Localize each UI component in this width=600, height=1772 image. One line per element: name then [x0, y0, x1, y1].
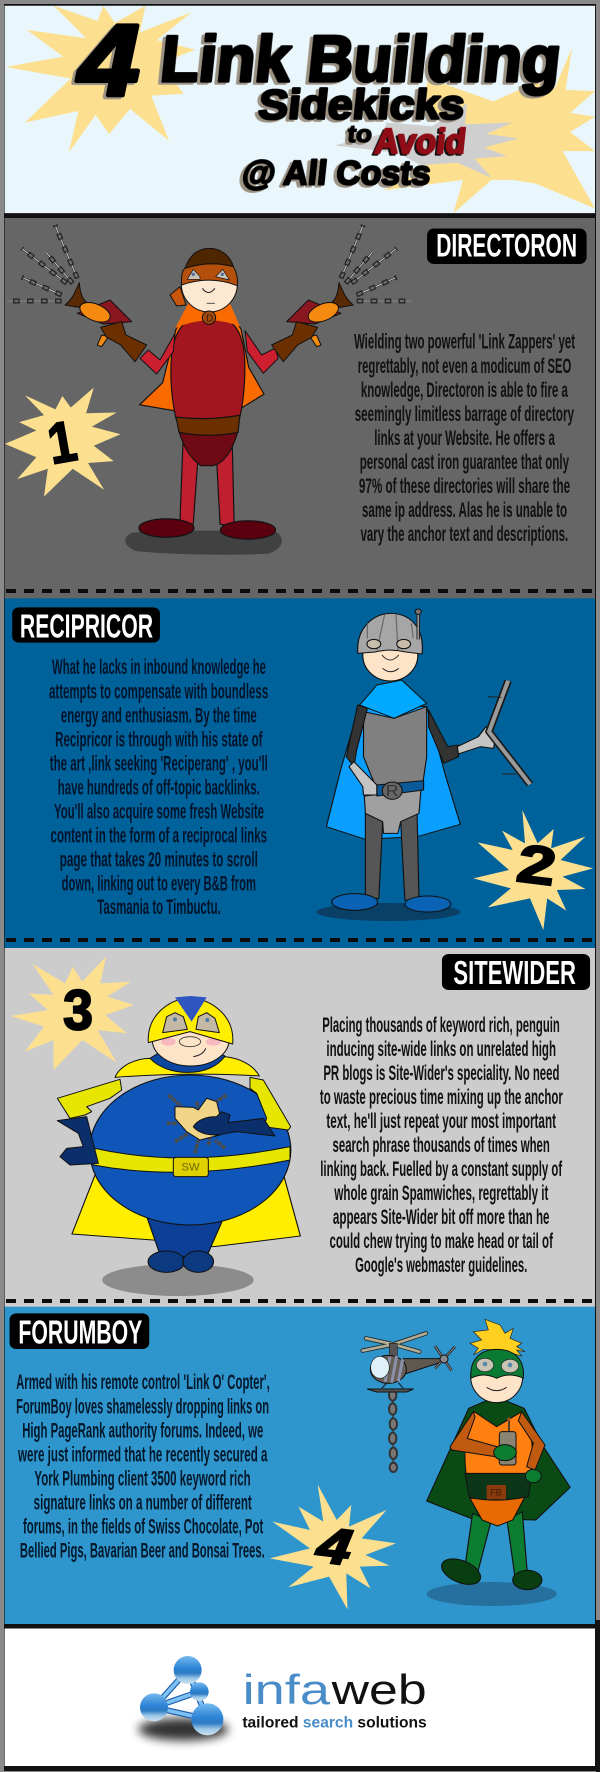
- panel: Forumboy: Bellied Pigs, Bavarian Beer and Bonsai Trees.: [20, 1538, 265, 1562]
- buckle: R: [386, 783, 399, 800]
- badge: number 3: [11, 957, 134, 1070]
- title: to: to: [346, 121, 373, 148]
- head: [470, 1319, 525, 1403]
- logo wordmark: web: [330, 1666, 427, 1713]
- skid: [367, 1383, 413, 1392]
- badge: number 4: [270, 1484, 396, 1609]
- logo wordmark: infa: [243, 1666, 331, 1713]
- title: Sidekicks: Sidekicks: [256, 81, 467, 128]
- arms: [140, 331, 278, 374]
- reciperang: [488, 681, 530, 784]
- panel: title banner: [5, 4, 595, 213]
- logo tagline: tailored search solutions: [242, 1714, 427, 1731]
- chain: [389, 1389, 397, 1472]
- character: Sitewider: [57, 996, 300, 1296]
- window: [371, 1356, 389, 1378]
- upper body: [57, 996, 291, 1177]
- right arm: [250, 1077, 291, 1130]
- panel: Recipricor: Recipricor is through with his state of: [55, 727, 263, 751]
- character: Forumboy: [427, 1319, 570, 1606]
- starburst: right: [383, 48, 595, 213]
- panel: Recipricor: attempts to compensate with boundless: [49, 679, 268, 703]
- panel: Recipricor: [5, 598, 595, 948]
- starburst: left: [6, 6, 195, 152]
- panel: Forumboy: High PageRank authority forums. Indeed, we: [22, 1418, 263, 1442]
- head: [170, 248, 240, 328]
- panel: Recipricor: have hundreds of off-topic backlinks.: [58, 775, 260, 799]
- heading: Forumboy: [10, 1313, 149, 1351]
- logo wordmark: [243, 1666, 427, 1713]
- panel: Forumboy: forums, in the fields of Swiss Chocolate, Pot: [23, 1514, 263, 1538]
- panel: Recipricor: content in the form of a reciprocal links: [51, 823, 267, 847]
- panel: Forumboy: Armed with his remote control 'Link O' Copter',: [16, 1369, 270, 1394]
- panel: Forumboy: [5, 1307, 595, 1624]
- buckle: [382, 782, 402, 800]
- forearms and hands: [349, 727, 496, 795]
- belt: [377, 781, 424, 796]
- body text: Sitewider: [320, 1012, 563, 1277]
- buckle: FB: [490, 1487, 502, 1497]
- panel: Forumboy: ForumBoy loves shamelessly dropping links on: [16, 1394, 269, 1418]
- gun and chains: left: [7, 225, 147, 362]
- title: 4: 4: [76, 4, 140, 117]
- radio: [499, 1418, 516, 1465]
- panel: Recipricor: You'll also acquire some fresh Website: [54, 799, 264, 823]
- sandwich: [175, 1098, 220, 1140]
- icon: infaweb molecule: [138, 1656, 228, 1741]
- left glove: [57, 1117, 98, 1165]
- badge: number 1: 1: [43, 409, 81, 477]
- badge: number 3: 3: [63, 978, 93, 1041]
- character: Recipricor: [316, 609, 530, 921]
- shoulders: [115, 1057, 259, 1077]
- legs: [365, 813, 419, 900]
- heading: Recipricor: [12, 607, 160, 645]
- body text: Forumboy: York Plumbing client 3500 keyword rich: [34, 1466, 251, 1490]
- starburst: grey behind Avoid: [335, 103, 518, 178]
- collar: [150, 1050, 225, 1072]
- head: D: [206, 313, 213, 324]
- hands: [494, 1445, 516, 1461]
- badge: number 2: 2: [513, 834, 560, 897]
- buckle: SW: [181, 1162, 200, 1174]
- heading: Forumboy: FORUMBOY: [18, 1314, 142, 1351]
- shoes: [332, 894, 378, 910]
- arms: [450, 1412, 545, 1470]
- arms: [346, 705, 458, 767]
- right glove: [193, 1112, 275, 1136]
- trunks: [364, 790, 421, 833]
- body text: Recipricor: page that takes 20 minutes to scroll: [60, 847, 258, 871]
- panel: Recipricor: the art ,link seeking 'Reciperang' , you'll: [50, 751, 268, 775]
- panel: Forumboy: were just informed that he recently secured a: [17, 1442, 268, 1466]
- panel: Recipricor: What he lacks in inbound knowledge he: [52, 654, 266, 679]
- panel: footer logo: [5, 1628, 595, 1766]
- sandwich chains: [167, 1095, 227, 1153]
- body text: Recipricor: Tasmania to Timbuctu.: [97, 894, 221, 919]
- panel: Directoron: [5, 218, 595, 599]
- cape: [326, 705, 460, 839]
- tail rotor: [435, 1346, 455, 1371]
- torso: [465, 1412, 533, 1478]
- body text: Forumboy: signature links on a number of different: [34, 1490, 252, 1514]
- belt: [465, 1473, 532, 1500]
- badge: number 1: [5, 388, 121, 497]
- buckle: [173, 1157, 208, 1177]
- belt: [93, 1147, 290, 1172]
- upper body: [450, 1319, 545, 1500]
- head: [148, 996, 233, 1066]
- character: Directoron: [7, 225, 412, 555]
- panel: Recipricor: down, linking out to every B&B from: [62, 871, 256, 895]
- rotor: [363, 1333, 426, 1357]
- lower body: [72, 1075, 300, 1296]
- body text: Forumboy: [16, 1369, 270, 1562]
- title: Avoid: Avoid: [373, 122, 468, 161]
- badge: number 4: 4: [312, 1517, 356, 1576]
- lower body: [427, 1397, 570, 1606]
- stripes: [385, 1356, 403, 1383]
- badge: number 2: [473, 810, 593, 930]
- panel: Sitewider: [5, 948, 595, 1308]
- helicopter with chain: [363, 1333, 455, 1472]
- tail: [403, 1359, 442, 1374]
- heading: Recipricor: RECIPRICOR: [20, 608, 153, 645]
- head: [358, 609, 422, 681]
- lower body: [125, 306, 282, 555]
- title: @ All Costs: @ All Costs: [240, 155, 433, 192]
- torso: [364, 707, 427, 785]
- buckle: [487, 1485, 506, 1499]
- gun and chains: right: [272, 225, 412, 362]
- cabin: [370, 1355, 406, 1383]
- left arm: [57, 1079, 122, 1118]
- body text: Directoron: [354, 330, 575, 546]
- shadow: [316, 903, 460, 921]
- body text: Recipricor: [49, 654, 268, 919]
- divider: Directoron to Recipricor: [6, 589, 595, 593]
- panel: Recipricor: energy and enthusiasm. By the time: [61, 703, 257, 727]
- title: Link Building: Link Building: [157, 23, 565, 95]
- collar: [360, 680, 427, 718]
